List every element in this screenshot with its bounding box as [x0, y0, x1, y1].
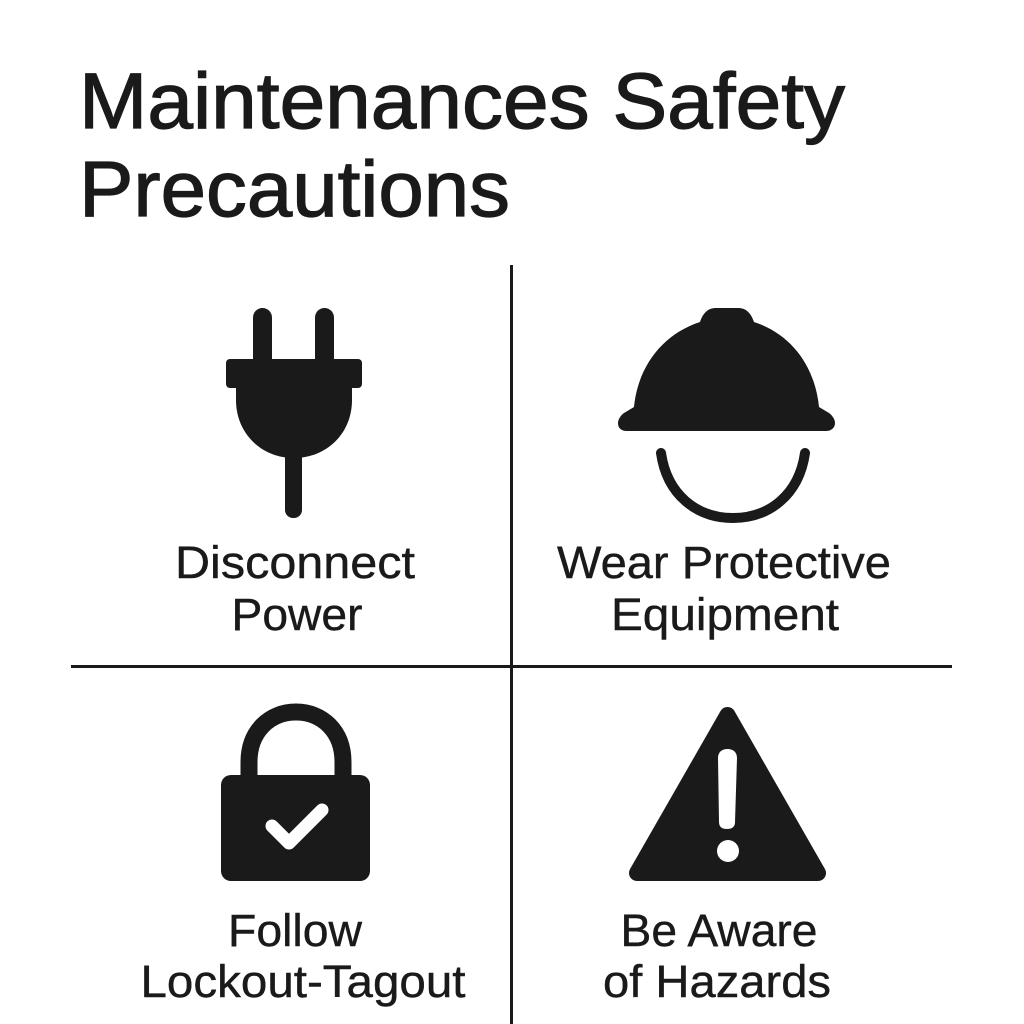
label: be aware of hazards: [603, 905, 831, 1007]
label: disconnect power: Power: [232, 589, 363, 640]
label: follow lockout-tagout: [140, 905, 466, 1007]
title: [79, 56, 846, 233]
label: follow lockout-tagout: Follow: [228, 905, 363, 956]
icon: warning triangle: [637, 715, 818, 873]
panel: be aware of hazards: [603, 715, 831, 1007]
panel: wear protective equipment: [557, 308, 891, 640]
icon: padlock: [221, 712, 370, 881]
panel: disconnect power: [175, 308, 416, 640]
label: disconnect power: Disconnect: [175, 537, 416, 588]
label: wear protective equipment: Wear Protective: [557, 537, 891, 588]
vertical divider: [510, 265, 513, 1024]
panel: follow lockout-tagout: [140, 712, 466, 1007]
label: follow lockout-tagout: Lockout-Tagout: [140, 956, 466, 1007]
icon: plug: [226, 308, 362, 518]
label: disconnect power: [175, 537, 416, 640]
label: wear protective equipment: Equipment: [611, 589, 840, 640]
label: be aware of hazards: Be Aware: [620, 905, 818, 956]
horizontal divider: [71, 665, 952, 668]
label: wear protective equipment: [557, 537, 891, 640]
label: be aware of hazards: of Hazards: [603, 956, 831, 1007]
icon: hard hat: [618, 308, 835, 518]
title: Precautions: [79, 144, 510, 233]
title: Maintenances Safety: [79, 56, 846, 145]
